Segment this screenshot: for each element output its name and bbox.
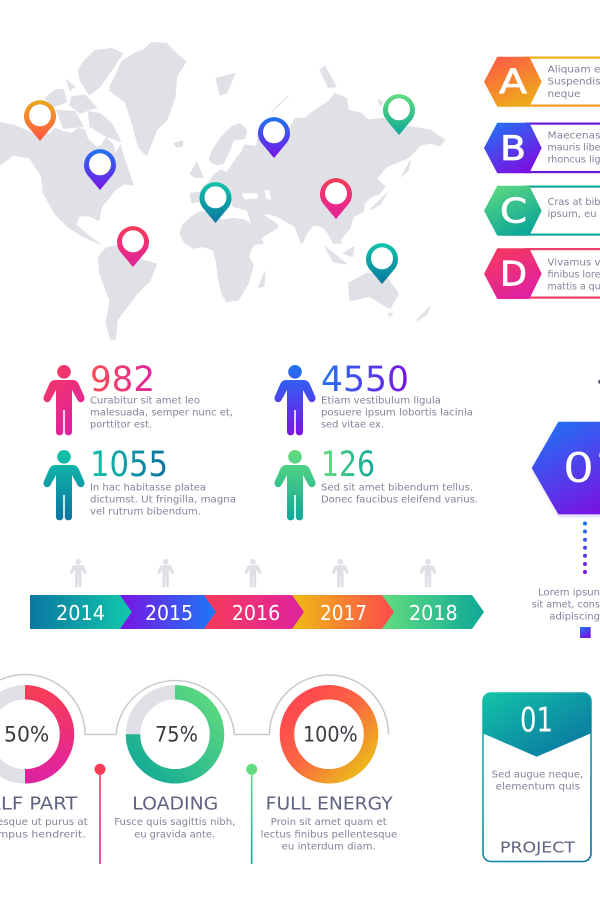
marker: green pin line [246,764,257,864]
panel: option C: ipsum, eu [548,209,596,220]
panel: project card [483,693,591,862]
world map [0,43,445,339]
stat: 982: porttitor est. [90,420,152,430]
panel: project card: elementum quis [496,781,580,792]
timeline arrow [30,595,484,629]
panel: option A: Aliquam e [548,64,600,76]
pin: blue America [84,149,116,190]
stat: 4550: sed vitae ex. [321,420,384,430]
pin: green Siberia [383,94,415,135]
map: Greenland [110,43,186,156]
stat: 1055: vel rutrum bibendum. [90,506,201,518]
pin: pink South America [117,226,149,267]
pin: teal Africa [200,182,232,223]
map: Eurasia [190,93,445,244]
panel: option B: Maecenas [548,130,600,142]
stat: 4550: Etiam vestibulum ligula [321,396,441,406]
stat: 1055: dictumst. Ut fringilla, magna [90,494,236,506]
panel: option C [484,186,600,236]
text block: loading: eu gravida ante. [134,829,215,840]
panel: project card: Sed augue neque, [492,769,583,780]
map: inland water [222,147,370,205]
text block: full energy: FULL ENERGY [266,794,393,814]
donut: 100 percent [287,692,371,776]
donut: 75 percent: 75% [155,723,198,748]
stat: 126 [274,445,478,520]
text block: full energy: eu interdum diam. [282,841,376,852]
panel: option A [484,56,600,107]
text block: full energy: Proin sit amet quam et [271,817,387,828]
text block: full energy: lectus finibus pellentesque [261,829,397,840]
stat: 982: 982 [90,360,155,400]
pin: pink China [320,178,352,219]
stat: 982: Curabitur sit amet leo [90,396,200,406]
map: smaller islands [174,66,430,321]
panel: project card: PROJECT [500,839,576,857]
text block: loading: LOADING [132,794,218,814]
text block: full energy [261,794,397,852]
donut: 50 percent: 50% [4,723,49,748]
pin: orange [24,100,56,141]
stat: 126: 126 [321,445,375,485]
panel: option A: A [499,63,527,102]
panel: hexagon 01: Lorem ipsun [538,588,600,599]
connector arcs [0,675,388,734]
map: South America [98,245,157,339]
panel: project card: 01 [520,701,553,741]
stat: 982 [44,360,233,435]
panel: option C: C [500,192,527,231]
icons: grey people row [70,559,436,587]
panel: hexagon 01: adipiscing [549,612,600,623]
stat: 1055: In hac habitasse platea [90,482,206,494]
text block: loading [114,794,235,840]
timeline arrow: 2018 [409,601,458,625]
text block: half part [0,794,88,840]
stat: 126: Donec faucibus eleifend varius. [321,494,478,506]
stat: 4550: 4550 [321,360,409,400]
panel: option A: Suspendis [548,76,600,88]
panel: option D: D [500,255,527,294]
stat: 982: malesuada, semper nunc et, [90,408,233,418]
map: Scandinavia [209,123,247,165]
donut: 50 percent [0,692,67,776]
panel: option B: B [500,129,526,168]
timeline arrow: 2014 [56,601,105,625]
stat: 1055: 1055 [90,445,168,485]
marker: pink pin line [94,764,106,864]
pin: blue Russia [258,117,290,158]
text block: loading: Fusce quis sagittis nibh, [114,817,235,828]
panel: option D: Vivamus v [548,258,600,268]
timeline arrow: 2015 [145,601,193,625]
timeline arrow: 2017 [320,601,367,625]
pin: teal Australia [366,243,398,284]
panel: option B [484,122,600,173]
map: Africa [180,212,263,302]
stat: 126: Sed sit amet bibendum tellus. [321,482,473,494]
stat: 4550 [274,360,473,435]
donut: 75 percent [133,692,217,776]
stat: 1055 [44,445,236,520]
map: Arctic islands [45,48,123,142]
stat: 4550: posuere ipsum lobortis lacinia [321,408,473,418]
panel: hexagon 01 [532,380,600,638]
panel: option D [484,248,600,299]
timeline arrow: 2016 [232,601,280,625]
panel: option A: neque [548,89,580,100]
donut: 100 percent: 100% [303,723,358,748]
map: North America [0,123,133,244]
